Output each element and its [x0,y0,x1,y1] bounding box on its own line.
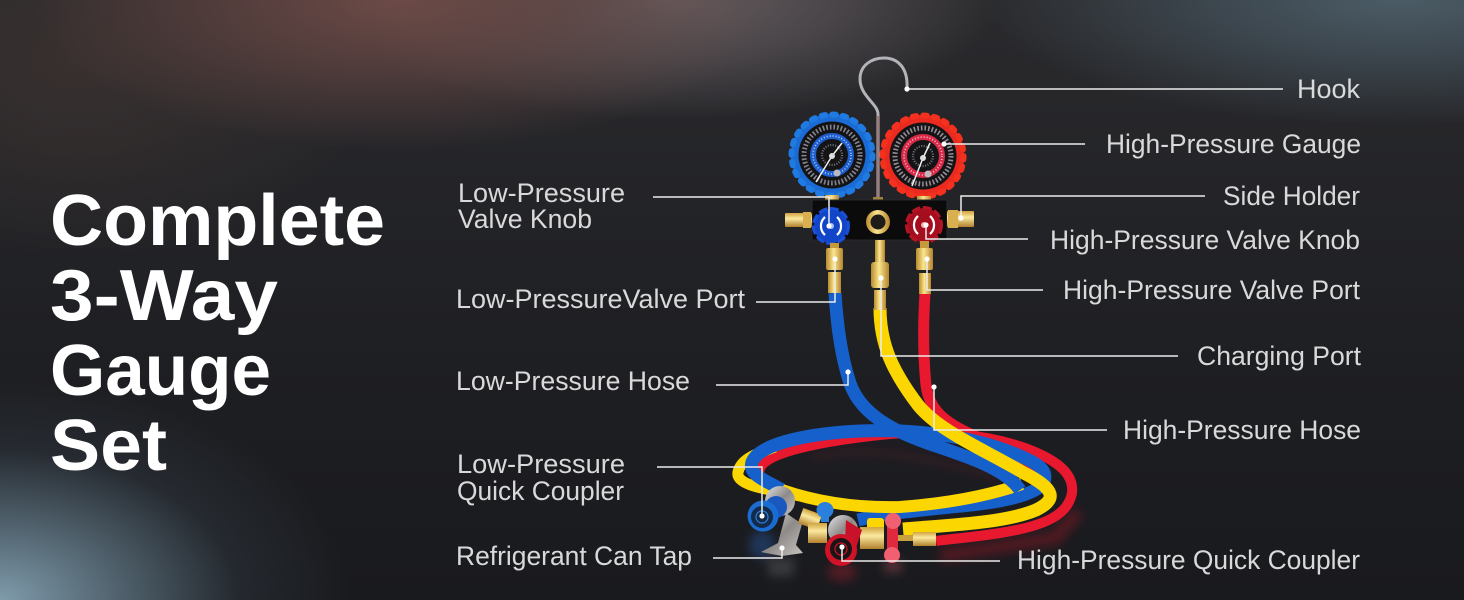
manifold body [812,200,947,240]
high-pressure gauge leader and label [941,129,1361,159]
couplers cluster [748,486,936,566]
title [50,181,385,486]
low-pressure quick coupler leader and label: Low-Pressure [457,449,625,479]
low-pressure quick coupler leader and label: Quick Coupler [457,476,624,506]
charging port leader and label [878,275,1361,371]
yellow ring hose [738,447,800,496]
high-pressure gauge leader and label: High-Pressure Gauge [1106,129,1361,159]
low-pressure valve port leader and label [456,256,838,314]
hose reflections [749,452,1078,581]
refrigerant can tap [761,508,827,556]
high-pressure quick coupler leader and label [839,544,1360,575]
low-pressure valve knob leader and label: Valve Knob [458,204,592,234]
side holder leader and label [958,181,1360,221]
yellow cap [867,518,884,530]
hook leader and label: Hook [1297,74,1360,104]
hook [860,58,907,201]
low-pressure valve port leader and label: Low-PressureValve Port [456,284,745,314]
red T-handle [884,513,901,563]
low-pressure quick coupler leader and label [457,449,765,519]
charging valve port [871,240,889,310]
low-pressure valve knob leader and label [458,178,832,234]
high-pressure valve port leader and label [924,256,1360,305]
hook leader and label [904,74,1360,104]
low-pressure valve knob leader and label: Low-Pressure [458,178,625,208]
title: Gauge [50,331,271,411]
title: Complete [50,181,385,261]
title: 3-Way [50,256,278,336]
low-pressure valve port [826,243,843,293]
high-pressure gauge [882,116,964,202]
low-pressure hose leader and label [456,366,851,396]
hoses [738,293,1072,541]
center port [866,210,890,234]
low-pressure gauge [792,114,872,201]
yellow front band [782,484,1022,507]
low-pressure quick coupler [748,486,795,532]
brass fitting [860,527,884,549]
yellow manifold hose [880,308,1050,529]
high-pressure valve port [916,241,933,294]
blue ring hose [751,431,1045,520]
refrigerant can tap leader and label: Refrigerant Can Tap [456,541,692,571]
high-pressure hose leader and label: High-Pressure Hose [1123,415,1361,445]
high-pressure valve knob [906,208,942,242]
charging port leader and label: Charging Port [1197,341,1361,371]
high-pressure valve knob leader and label [923,222,1360,255]
blue cap [816,502,834,522]
blue manifold hose [835,293,1020,490]
side holder leader and label: Side Holder [1223,181,1360,211]
high-pressure valve port leader and label: High-Pressure Valve Port [1063,275,1360,305]
title: Set [50,406,167,486]
high-pressure quick coupler leader and label: High-Pressure Quick Coupler [1017,545,1360,575]
high-pressure hose leader and label [931,384,1361,445]
low-pressure valve knob [814,208,848,244]
right side holder [947,210,974,228]
high-pressure quick coupler [825,515,862,566]
left side holder [785,212,812,228]
red hose [759,293,1072,541]
hose end fitting [898,532,936,546]
low-pressure hose leader and label: Low-Pressure Hose [456,366,690,396]
high-pressure valve knob leader and label: High-Pressure Valve Knob [1050,225,1360,255]
